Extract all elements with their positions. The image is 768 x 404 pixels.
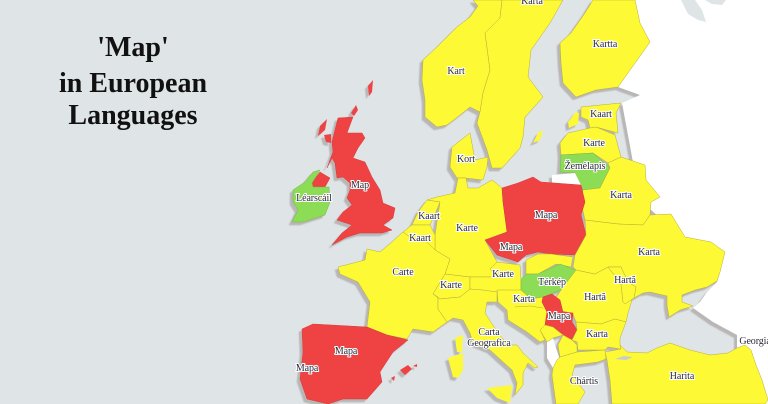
Switzerland [433,274,470,299]
title: 'Map' [97,32,169,63]
label: Bulgaria: Karta [586,329,609,340]
label: Portugal: Mapa [296,363,319,374]
label: Serbia: Mapa [548,311,571,322]
Ireland [292,170,330,222]
label: Finland: Kartta [593,39,618,50]
label: Norway: Kart [447,66,465,77]
Spain and Portugal [300,324,408,404]
Belarus [581,157,660,225]
label: Netherlands: Kaart [418,211,440,222]
Bulgaria [572,319,626,350]
label: Poland: Mapa [535,210,558,221]
Sicily [487,385,512,403]
label: Austria: Karte [492,269,515,280]
title: in European [59,68,207,99]
label: France: Carte [392,267,414,278]
label: Germany: Karte [456,223,479,234]
Moldova [608,267,636,304]
Marmara sea [615,356,633,360]
Albania [547,338,560,368]
label: Italy second line: Geografica [467,338,511,349]
Finland [560,0,650,97]
label: UK: Map [351,180,369,191]
title [59,32,207,131]
Montenegro [540,325,563,342]
Sweden [477,0,563,168]
label: Belarus: Karta [610,190,633,201]
country labels [296,0,768,387]
Sardinia [448,353,463,378]
Denmark [450,133,488,180]
Arctic islands [681,0,726,22]
Northern Ireland [312,172,330,187]
Romania [555,267,632,324]
label: Greece: Chártis [570,376,598,387]
Slovakia [526,254,573,274]
Lithuania [560,153,610,190]
label: Hungary: Térkép [538,277,566,288]
label: Moldova: Hartă [614,275,637,286]
Netherlands [412,200,440,225]
Bosnia border [515,306,543,308]
label: Spain: Mapa [335,346,358,357]
Ukraine [573,214,725,317]
United Kingdom [327,117,395,245]
Greece [552,350,606,404]
Turkey [605,343,768,404]
Balearic islands [391,364,417,381]
Scottish islands [318,80,373,143]
label: Switzerland: Karte [440,280,463,291]
Hungary [521,264,576,299]
label: Romania: Hartă [584,292,607,303]
Gotland island [533,130,543,143]
non-European white land [618,0,768,404]
label: Belgium: Kaart [409,233,431,244]
Serbia [542,294,577,340]
label: Ukraine: Karta [638,247,661,258]
label: Croatia: Karta [513,294,536,305]
label: Italy: Carta [478,327,500,338]
label: Ireland: Léarscáil [296,193,332,204]
label: Lithuania: Žemėlapis [565,160,606,172]
label: Turkey: Harita [670,371,695,382]
Belgium [403,225,435,250]
title: Languages [68,100,198,131]
Croatia and Bosnia [497,290,547,342]
Austria [470,262,521,292]
Latvia [560,127,621,163]
Kaliningrad [552,173,581,185]
France [338,232,450,339]
label: Latvia: Karte [583,138,606,149]
Corsica [455,335,463,352]
label: Denmark: Kort [457,154,475,165]
Estonia [581,103,621,133]
Germany [427,178,507,277]
Saaremaa island [568,112,579,128]
land masses with coastal shadow [292,0,768,404]
Italy [433,289,538,395]
label: Estonia: Kaart [590,109,612,120]
Norway [422,0,502,127]
label: Czechia: Mapa [500,242,523,253]
North Macedonia [558,335,577,357]
Poland and Czechia [485,177,586,262]
